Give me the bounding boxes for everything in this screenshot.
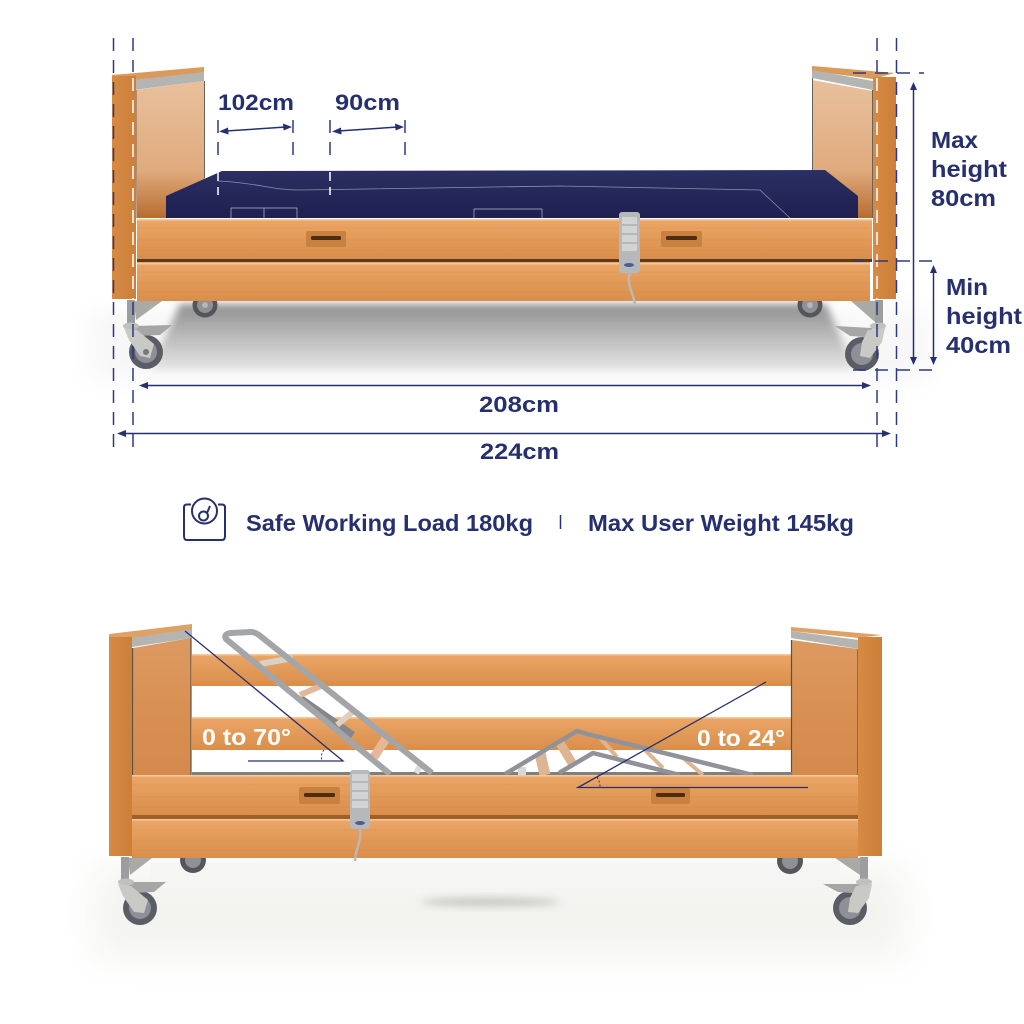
side rail mid back [192,717,792,750]
spec: max user weight: Max User Weight 145kg [588,510,854,536]
dimension guide lines top [114,38,938,450]
left caster bottom [118,857,166,925]
handle bottom left [299,787,340,804]
left post bottom [109,637,132,856]
dimension: 224cm [117,430,891,464]
angle marker: legrest [578,682,808,788]
angle marker: legrest: 0 to 24° [697,725,785,751]
dimension: max height: Max [931,127,978,153]
spec: safe working load: Safe Working Load 180kg [246,510,533,536]
right post bottom [858,637,882,856]
right footboard panel [812,66,895,218]
bottom bed photo: low bed with raised sections [95,624,905,958]
mattress platform line [192,772,792,775]
dimension: 90cm: 90cm [335,90,400,115]
rail handle right [661,231,702,247]
gap bottom rails [132,815,858,819]
left post [112,76,136,299]
top bed photo: raised bed with mattress [90,66,930,380]
legrest frame raised [505,731,753,775]
gap between rails [137,259,872,262]
dimension: 224cm: 224cm [480,439,559,464]
rail front upper [132,775,858,815]
dimension: 90cm [332,90,404,134]
hand control top [619,212,640,304]
floor shadow bottom [95,862,905,958]
rear wheels bottom [180,847,803,874]
rail handle left [306,231,346,247]
handle bottom right [651,788,690,804]
rear wheels top [192,292,822,318]
dimension: max height [910,82,1007,365]
dimension: min height: Min [946,274,988,300]
upper side rail [137,219,872,259]
left caster top [123,300,172,369]
rail front lower [132,819,858,858]
icon: weighing scale [184,498,225,540]
angle marker: backrest: 0 to 70° [202,724,291,750]
dimension: 208cm: 208cm [479,392,559,417]
dimension: min height [930,265,1022,365]
angle marker: backrest [185,631,343,761]
dimension: 102cm [218,90,294,134]
floor shadow top [90,304,930,380]
mattress [166,170,858,218]
right caster bottom [823,857,872,925]
lower side rail [137,262,870,301]
side rail upper back [192,654,792,686]
dimension: 102cm: 102cm [218,90,294,115]
dimension: min height: 40cm [946,332,1011,358]
hand control bottom [350,770,370,861]
dimension: min height: height [946,303,1022,329]
spec divider [560,515,562,529]
backrest frame raised [225,632,432,774]
dimension: max height: 80cm [931,185,996,211]
dimension: max height: height [931,156,1007,182]
dimension: 208cm [139,382,871,417]
right post [873,77,896,299]
right caster top [835,300,886,371]
left headboard panel [112,67,205,218]
right panel bottom [791,627,882,775]
left panel bottom [109,624,192,775]
